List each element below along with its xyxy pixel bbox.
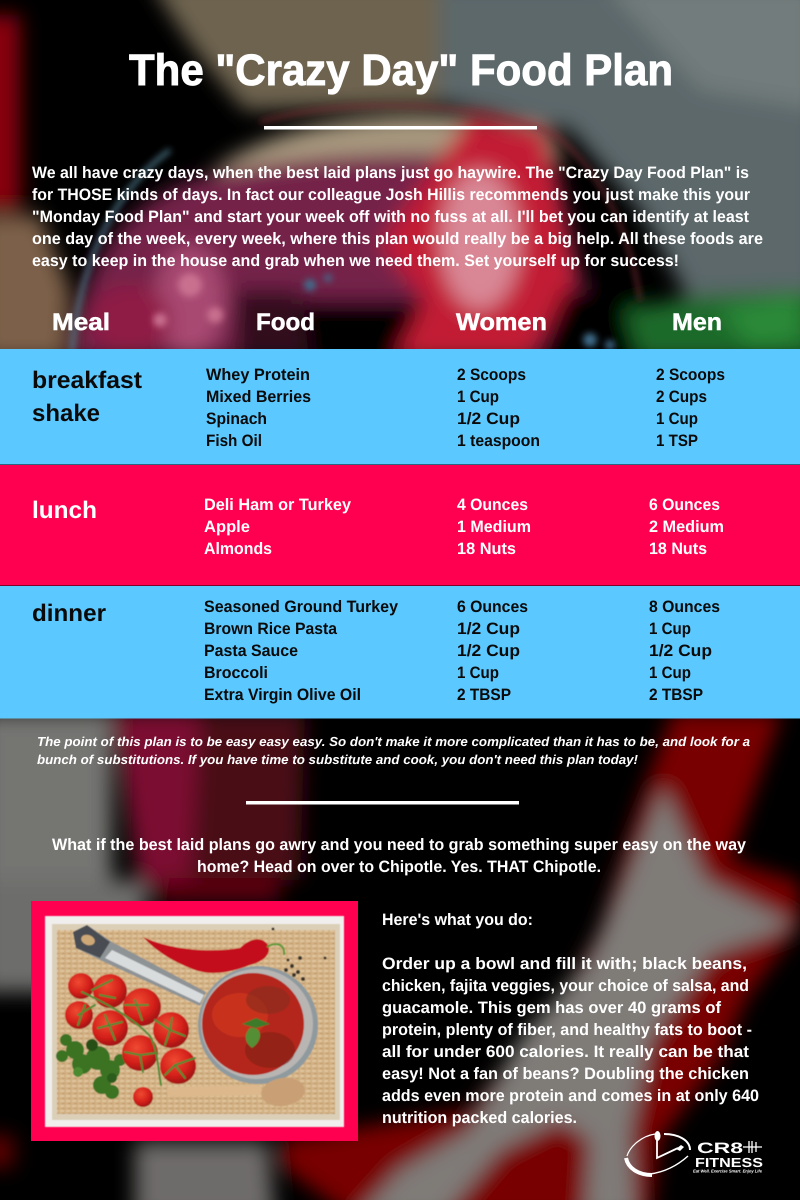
panel: breakfast shake: 2 Scoops xyxy=(457,366,526,384)
panel: lunch: Almonds xyxy=(204,540,272,558)
pan handle xyxy=(73,925,206,1006)
panel: breakfast shake: 1 Cup xyxy=(656,410,698,428)
panel: lunch: lunch xyxy=(32,497,97,524)
logo: CR8 Fitness xyxy=(626,1131,763,1175)
wooden spoon xyxy=(167,1075,307,1109)
panel: dinner: 1 Cup xyxy=(457,664,499,682)
panel: dinner: 1/2 Cup xyxy=(457,642,520,660)
Here's what you do text: adds even more protein and comes in at only 640 xyxy=(382,1087,759,1105)
Here's what you do text: protein, plenty of fiber, and healthy fats to boot - xyxy=(382,1021,752,1039)
intro text: "Monday Food Plan" and start your week off with no fuss at all. I'll bet you can identify at least xyxy=(32,208,749,226)
italic note xyxy=(37,734,750,767)
pepper xyxy=(143,928,326,981)
panel: breakfast shake xyxy=(0,349,800,464)
lower half xyxy=(0,712,112,887)
Chipotle intro text: What if the best laid plans go awry and you need to grab something super easy on the way xyxy=(52,836,747,854)
panel: dinner: Broccoli xyxy=(204,664,268,682)
intro text xyxy=(32,164,763,270)
logo: CR8 Fitness: Eat Well. Exercise Smart. Enjoy Life xyxy=(693,1168,763,1174)
Here's what you do text: nutrition packed calories. xyxy=(382,1109,577,1127)
panel: breakfast shake: shake xyxy=(32,400,100,427)
panel: breakfast shake: Spinach xyxy=(206,410,267,428)
title: The "Crazy Day" Food Plan xyxy=(129,46,673,95)
panel: breakfast shake: Fish Oil xyxy=(206,432,262,450)
Here's what you do text: easy! Not a fan of beans? Doubling the chicken xyxy=(382,1065,749,1083)
panel: dinner: Extra Virgin Olive Oil xyxy=(204,686,361,704)
panel: lunch: 1 Medium xyxy=(457,518,531,536)
logo: CR8 Fitness: CR8 xyxy=(697,1140,743,1157)
panel: breakfast shake: 1 teaspoon xyxy=(457,432,540,450)
panel: breakfast shake: 2 Cups xyxy=(656,388,707,406)
panel: dinner: 1 Cup xyxy=(649,620,691,638)
panel: dinner: dinner xyxy=(32,600,106,627)
panel: breakfast shake: Whey Protein xyxy=(206,366,310,384)
Here's what you do text: guacamole. This gem has over 40 grams of xyxy=(382,999,722,1017)
Here's what you do text: Order up a bowl and fill it with; black beans, xyxy=(382,955,747,973)
panel: dinner: Seasoned Ground Turkey xyxy=(204,598,399,616)
panel: breakfast shake: 1/2 Cup xyxy=(457,410,520,428)
panel: dinner: 6 Ounces xyxy=(457,598,528,616)
divider xyxy=(264,126,537,130)
panel: dinner: Pasta Sauce xyxy=(204,642,298,660)
table header: Meal xyxy=(52,309,110,336)
table header: Women xyxy=(456,309,547,336)
panel: lunch xyxy=(0,465,800,586)
Here's what you do text: chicken, fajita veggies, your choice of salsa, and xyxy=(382,977,749,995)
italic note: bunch of substitutions. If you have time to substitute and cook, you don't need this plan today! xyxy=(37,752,639,767)
Chipotle intro text: home? Head on over to Chipotle. Yes. THAT Chipotle. xyxy=(197,858,601,876)
logo: CR8 Fitness: FITNESS xyxy=(695,1155,763,1170)
Here's what you do text: all for under 600 calories. It really can be that xyxy=(382,1043,750,1061)
parsley xyxy=(56,1034,126,1099)
panel: dinner: 1 Cup xyxy=(649,664,691,682)
panel: lunch: Apple xyxy=(204,518,250,536)
panel: lunch: 18 Nuts xyxy=(649,540,707,558)
Here's what you do text xyxy=(382,911,759,1127)
panel: dinner xyxy=(0,586,800,718)
intro text: We all have crazy days, when the best laid plans just go haywire. The "Crazy Day Food Plan" is xyxy=(32,164,749,182)
intro text: easy to keep in the house and grab when we need them. Set yourself up for success! xyxy=(32,252,679,270)
tomatoes xyxy=(65,973,196,1107)
photo: tomato sauce pan with pink frame xyxy=(31,901,358,1141)
Here's what you do text: Here's what you do: xyxy=(382,911,533,929)
panel: dinner: 2 TBSP xyxy=(649,686,703,704)
pan with sauce xyxy=(198,966,318,1084)
panel: lunch: 18 Nuts xyxy=(457,540,516,558)
panel: lunch: 4 Ounces xyxy=(457,496,528,514)
panel: dinner: Brown Rice Pasta xyxy=(204,620,338,638)
Chipotle intro text xyxy=(52,836,747,876)
vine xyxy=(78,980,195,1085)
table header: Food xyxy=(256,309,315,336)
intro text: one day of the week, every week, where this plan would really be a big help. All these foods are xyxy=(32,230,763,248)
panel: breakfast shake: Mixed Berries xyxy=(206,388,311,406)
intro text: for THOSE kinds of days. In fact our colleague Josh Hillis recommends you just make this your xyxy=(32,186,751,204)
panel: breakfast shake: 1 TSP xyxy=(656,432,698,450)
panel: lunch: 2 Medium xyxy=(649,518,724,536)
panel: breakfast shake: 1 Cup xyxy=(457,388,499,406)
panel: lunch: 6 Ounces xyxy=(649,496,720,514)
panel: dinner: 2 TBSP xyxy=(457,686,511,704)
panel: breakfast shake: breakfast xyxy=(32,367,142,394)
panel: dinner: 8 Ounces xyxy=(649,598,720,616)
table header xyxy=(52,309,722,336)
panel: dinner: 1/2 Cup xyxy=(649,642,712,660)
table header: Men xyxy=(672,309,722,336)
italic note: The point of this plan is to be easy easy easy. So don't make it more complicated than it has to be, and look for a xyxy=(37,734,750,749)
panel: dinner: 1/2 Cup xyxy=(457,620,520,638)
divider xyxy=(246,801,519,804)
panel: breakfast shake: 2 Scoops xyxy=(656,366,725,384)
panel: lunch: Deli Ham or Turkey xyxy=(204,496,352,514)
